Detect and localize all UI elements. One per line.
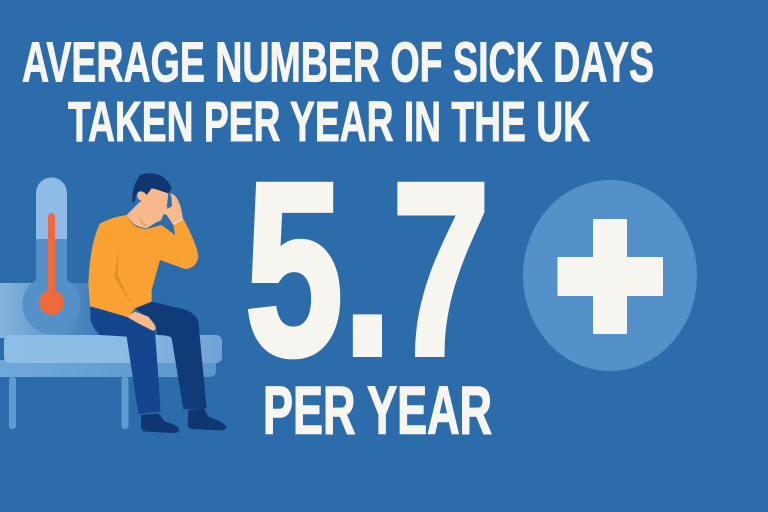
near leg [90, 307, 161, 414]
icon: thermometer [22, 178, 80, 334]
hair [132, 173, 172, 203]
gap between hand and head [167, 197, 172, 209]
far leg [135, 302, 207, 409]
sweater [88, 215, 198, 317]
big number: 5.7 [245, 132, 490, 407]
sweater fold [114, 250, 132, 305]
per year label: PER YEAR [263, 372, 492, 448]
far shoe [188, 408, 226, 430]
near shoe [141, 413, 179, 433]
raised hand [162, 193, 183, 225]
head [137, 188, 168, 225]
neck [127, 202, 160, 228]
title [22, 30, 654, 154]
neck shadow [139, 215, 148, 226]
icon: bench [0, 283, 222, 429]
person sitting with head in hand [88, 173, 226, 433]
icon: medical cross in circle [523, 180, 697, 371]
hand on knee [127, 312, 156, 331]
sleeve cuff [173, 218, 183, 225]
